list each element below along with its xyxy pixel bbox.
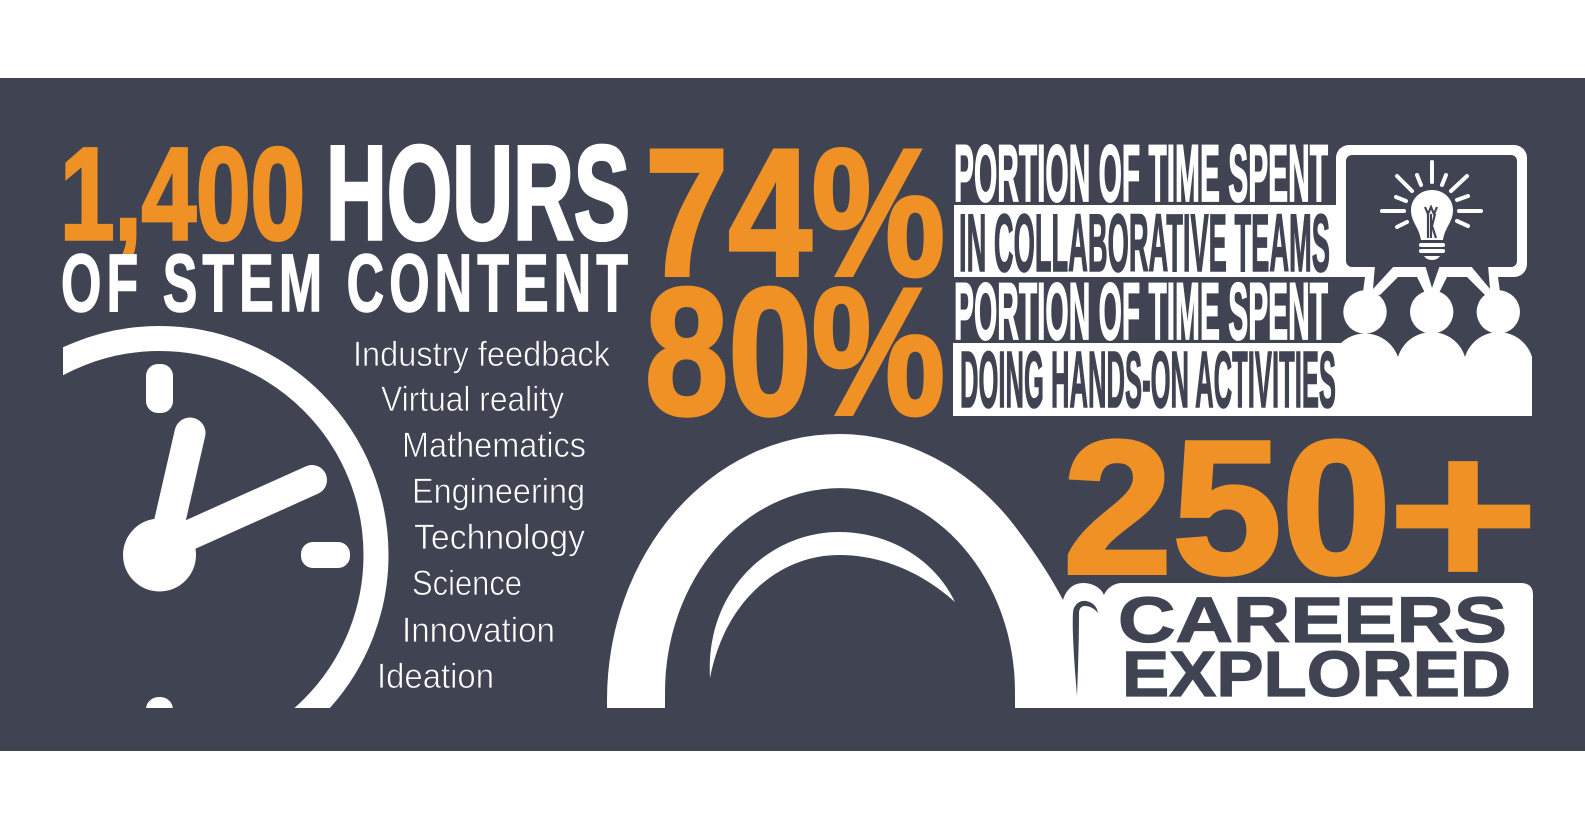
number: 250: 250 [1063,402,1391,614]
label: explored: EXPLORED [1122,638,1511,710]
icon: light bulb [1382,162,1481,260]
clock tick: six [146,697,173,708]
clock tick: three [301,542,350,568]
clock hands and hub [123,433,312,592]
label: careers: CAREERS [1118,584,1507,656]
heading number: 1,400: 1,400 [60,120,305,267]
topic: industry feedback: Industry feedback [353,335,610,374]
statistic: 80%: 80% [645,251,945,453]
clock tick: twelve [146,364,173,413]
topic list [353,335,610,696]
speech bubble outline [1336,145,1527,295]
topic: engineering: Engineering [412,472,585,511]
statistic: 250+ [1063,393,1541,636]
topic: technology: Technology [414,518,585,557]
white band behind collaborative teams [954,205,1354,277]
icon: arch with careers plate [607,434,1533,708]
icon: clock [63,326,388,708]
hook accent on plate [1073,601,1098,696]
clock ring [63,326,388,708]
person: left head [1343,290,1387,334]
topic: virtual reality: Virtual reality [381,380,564,419]
statistic: 74%: 74% [645,112,945,314]
person: centre head [1410,290,1453,334]
subheading: of STEM content: OF STEM CONTENT [61,238,633,329]
arch crescent highlight [710,532,955,678]
heading word: HOURS: HOURS [326,119,630,268]
arch outer body and plate [607,434,1533,708]
person: right head [1477,290,1520,334]
topic: innovation: Innovation [402,611,555,650]
topic: ideation: Ideation [377,657,494,696]
arch inner opening [665,488,1015,708]
white band behind hands-on activities [953,332,1532,416]
topic: science: Science [412,564,522,603]
topic: mathematics: Mathematics [402,426,586,465]
heading: 1,400 hours of STEM content [60,119,633,329]
plus sign: + [1385,393,1541,636]
icon: team with idea speech bubble [1336,145,1527,334]
